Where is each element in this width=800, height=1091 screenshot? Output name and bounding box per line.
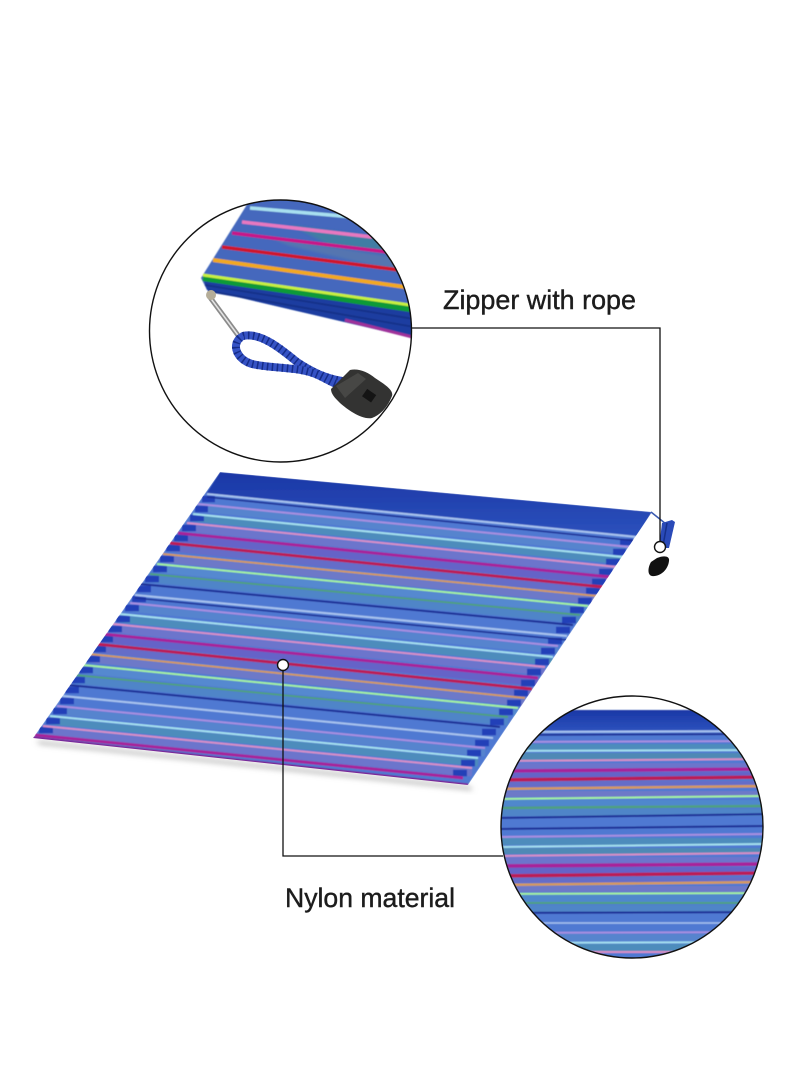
leader line: zipper bbox=[412, 328, 666, 552]
rope loop bbox=[236, 335, 342, 385]
pouch zipper band bbox=[206, 472, 652, 537]
pouch bottom hem bbox=[33, 738, 468, 785]
pouch corner close-up bbox=[200, 200, 411, 339]
mesh close-up fabric bbox=[502, 732, 762, 958]
zoom circle: nylon material bbox=[495, 696, 770, 960]
zoom circle: zipper with rope bbox=[150, 195, 430, 462]
rope stopper bbox=[331, 369, 392, 418]
leader line: nylon bbox=[278, 660, 503, 856]
main mesh pouch bbox=[33, 472, 652, 785]
pouch right seam bbox=[453, 542, 633, 773]
label: nylon material: Nylon material bbox=[285, 883, 455, 913]
pouch left seam bbox=[39, 499, 215, 730]
miniature zipper pull on pouch bbox=[648, 512, 675, 576]
label: zipper with rope: Zipper with rope bbox=[443, 285, 636, 315]
main pouch shadow bbox=[36, 741, 473, 790]
zipper pull metal bbox=[206, 290, 240, 338]
